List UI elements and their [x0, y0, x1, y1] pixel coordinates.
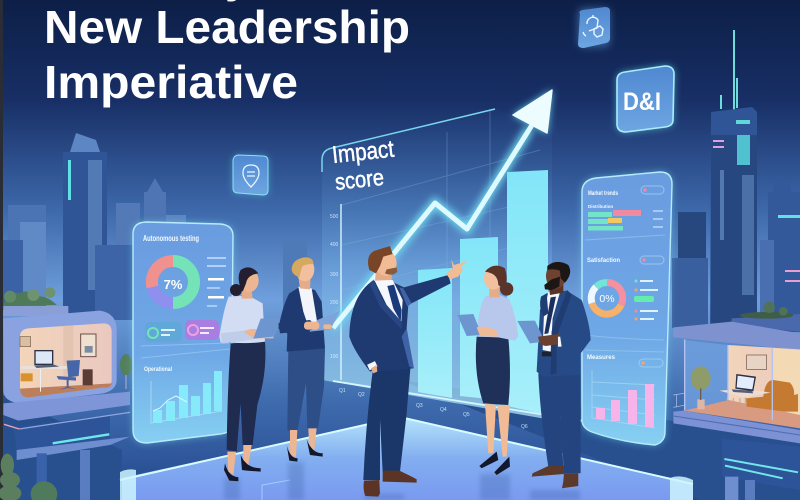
panel heading: Market trends	[588, 190, 618, 197]
axis labels	[330, 214, 528, 430]
icon tile: top app	[578, 7, 610, 48]
left room module	[0, 287, 130, 500]
stacked bars: Distribution	[588, 204, 613, 209]
status pill	[640, 256, 664, 264]
room shell	[3, 311, 117, 403]
glass wing	[684, 340, 728, 411]
axis labels: Q3	[416, 403, 423, 409]
man with laptop, right	[517, 262, 591, 488]
deck under room	[3, 392, 130, 421]
axis labels: 200	[330, 300, 339, 306]
donut legend	[634, 280, 658, 320]
donut heading: Satisfaction	[587, 257, 620, 264]
woman with tablet, blonde	[278, 257, 340, 462]
donut chart 7%: 7%	[164, 277, 183, 292]
under structure	[722, 438, 800, 490]
right skyline	[672, 30, 800, 332]
room interior	[20, 323, 112, 397]
floor platform	[120, 417, 693, 500]
frame posts	[685, 339, 772, 420]
left dashboard panel	[133, 222, 233, 443]
axis labels: 100	[330, 354, 339, 360]
chart title: score	[334, 164, 385, 195]
warm room	[728, 345, 800, 426]
icon tile: shield	[233, 155, 268, 195]
status pill	[639, 359, 663, 367]
chart axis	[333, 204, 590, 422]
stacked bars	[588, 204, 663, 230]
shrubs	[0, 454, 57, 500]
roof planter	[732, 302, 800, 332]
presenter pointing	[349, 246, 468, 497]
title	[44, 0, 410, 108]
floor slab	[673, 411, 800, 443]
left small tree	[120, 354, 132, 389]
axis labels: 300	[330, 272, 339, 278]
planter	[3, 287, 68, 316]
title: New Leadership	[44, 1, 410, 53]
chart title: Impact	[331, 136, 396, 169]
donut chart 0%	[591, 282, 623, 314]
left edge strip	[0, 0, 3, 500]
bars heading: Measures	[587, 354, 615, 361]
status chips	[145, 320, 219, 342]
sofa	[746, 380, 798, 412]
floor reflections	[224, 462, 580, 500]
woman with tablet, left	[219, 267, 283, 481]
railing	[673, 393, 684, 407]
legend lines	[207, 257, 226, 307]
right dashboard panel	[582, 172, 672, 445]
wall picture	[747, 355, 767, 369]
pink bars chart	[592, 370, 655, 428]
left skyline	[3, 133, 307, 322]
icon tile: D&I: D&I	[623, 88, 661, 116]
chart title	[331, 136, 398, 195]
presenters group	[219, 246, 591, 497]
central chart panel	[322, 90, 590, 430]
axis labels: 500	[330, 214, 339, 220]
bars	[418, 170, 548, 415]
divider	[584, 335, 664, 352]
bar chart heading: Operational	[144, 366, 172, 373]
donut chart 7%	[152, 261, 194, 303]
axis labels: Q2	[358, 392, 365, 398]
desk with laptop	[21, 350, 67, 392]
title: Imperiative	[44, 56, 298, 108]
axis labels: Q6	[521, 424, 528, 430]
icon tile: D&I	[617, 66, 674, 132]
cabinet and frames	[20, 334, 96, 385]
right room module	[673, 302, 800, 500]
plant	[691, 366, 711, 409]
table with laptop	[719, 374, 771, 414]
axis labels: Q5	[463, 412, 470, 418]
axis labels: 400	[330, 242, 339, 248]
roof slab	[673, 322, 800, 350]
axis labels: Q1	[339, 388, 346, 394]
axis labels: Q4	[440, 407, 447, 413]
divider	[585, 235, 665, 240]
rising arrow	[333, 90, 552, 328]
chair	[57, 360, 80, 390]
status pill	[641, 186, 664, 194]
donut chart 0%: 0%	[599, 293, 615, 305]
panel divider	[141, 343, 230, 358]
bar chart	[151, 371, 222, 423]
woman with tablet, right	[457, 266, 518, 475]
panel heading: Autonomous testing	[143, 234, 199, 243]
mid ground band	[3, 380, 800, 500]
